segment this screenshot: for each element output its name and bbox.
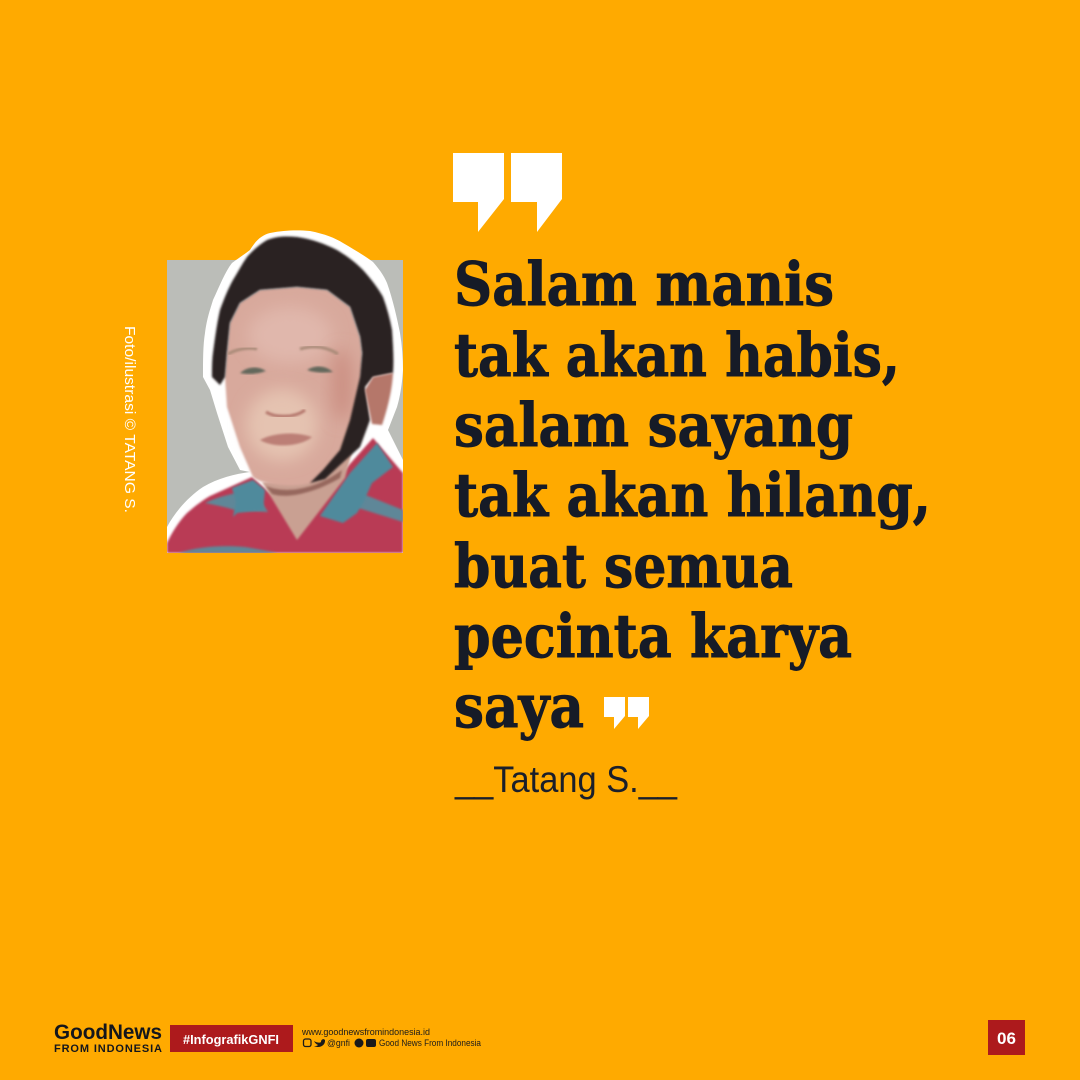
skin highlight xyxy=(248,307,332,363)
lower face highlight xyxy=(246,389,318,461)
icon: opening quotation mark xyxy=(453,153,562,232)
footer website and social links xyxy=(301,1027,481,1048)
footer logo: GoodNews From Indonesia: GoodNews xyxy=(54,1021,162,1044)
face xyxy=(225,287,362,485)
right cheek shading xyxy=(331,349,353,421)
quote text: tak akan habis, xyxy=(454,321,900,391)
quote text xyxy=(454,250,931,742)
page number badge: 06 xyxy=(997,1029,1016,1048)
page number badge xyxy=(988,1020,1025,1055)
footer website and social links: @gnfi xyxy=(327,1038,350,1048)
left eyebrow xyxy=(228,348,257,354)
footer hashtag badge: #InfografikGNFI xyxy=(183,1032,279,1047)
footer hashtag badge xyxy=(170,1025,293,1052)
white cut-out outline xyxy=(167,230,403,553)
neck xyxy=(262,452,352,540)
icon: twitter xyxy=(314,1039,325,1047)
shirt xyxy=(167,438,403,553)
mouth xyxy=(260,433,312,445)
left eye xyxy=(240,367,266,374)
neck shadow xyxy=(266,470,342,496)
icon: instagram xyxy=(304,1039,311,1046)
left shirt collar xyxy=(232,480,265,517)
photo credit: Foto/ilustrasi © TATANG S. xyxy=(121,326,137,513)
ear xyxy=(365,373,393,425)
photo: portrait of Tatang S. xyxy=(167,230,403,553)
right eyebrow xyxy=(300,347,338,354)
footer website and social links: www.goodnewsfromindonesia.id xyxy=(301,1027,430,1037)
quote text: saya xyxy=(454,672,584,742)
shirt stripes xyxy=(178,491,403,553)
footer website and social links: Good News From Indonesia xyxy=(379,1038,481,1048)
icon: youtube xyxy=(366,1039,376,1047)
footer logo: GoodNews From Indonesia xyxy=(54,1021,162,1055)
hair xyxy=(212,236,393,483)
icon: closing quotation mark xyxy=(604,697,649,729)
attribution: __Tatang S.__ xyxy=(454,759,677,800)
quote text: buat semua xyxy=(454,532,793,602)
nose xyxy=(266,410,305,416)
quote text: Salam manis xyxy=(454,250,834,320)
right shirt collar xyxy=(320,443,393,523)
quote text: pecinta karya xyxy=(454,602,852,672)
icon: facebook xyxy=(354,1038,364,1048)
quote text: salam sayang xyxy=(454,391,853,461)
photo background xyxy=(167,260,403,553)
quote text: tak akan hilang, xyxy=(454,461,931,531)
right eye xyxy=(307,366,333,373)
footer logo: GoodNews From Indonesia: FROM INDONESIA xyxy=(54,1043,162,1055)
